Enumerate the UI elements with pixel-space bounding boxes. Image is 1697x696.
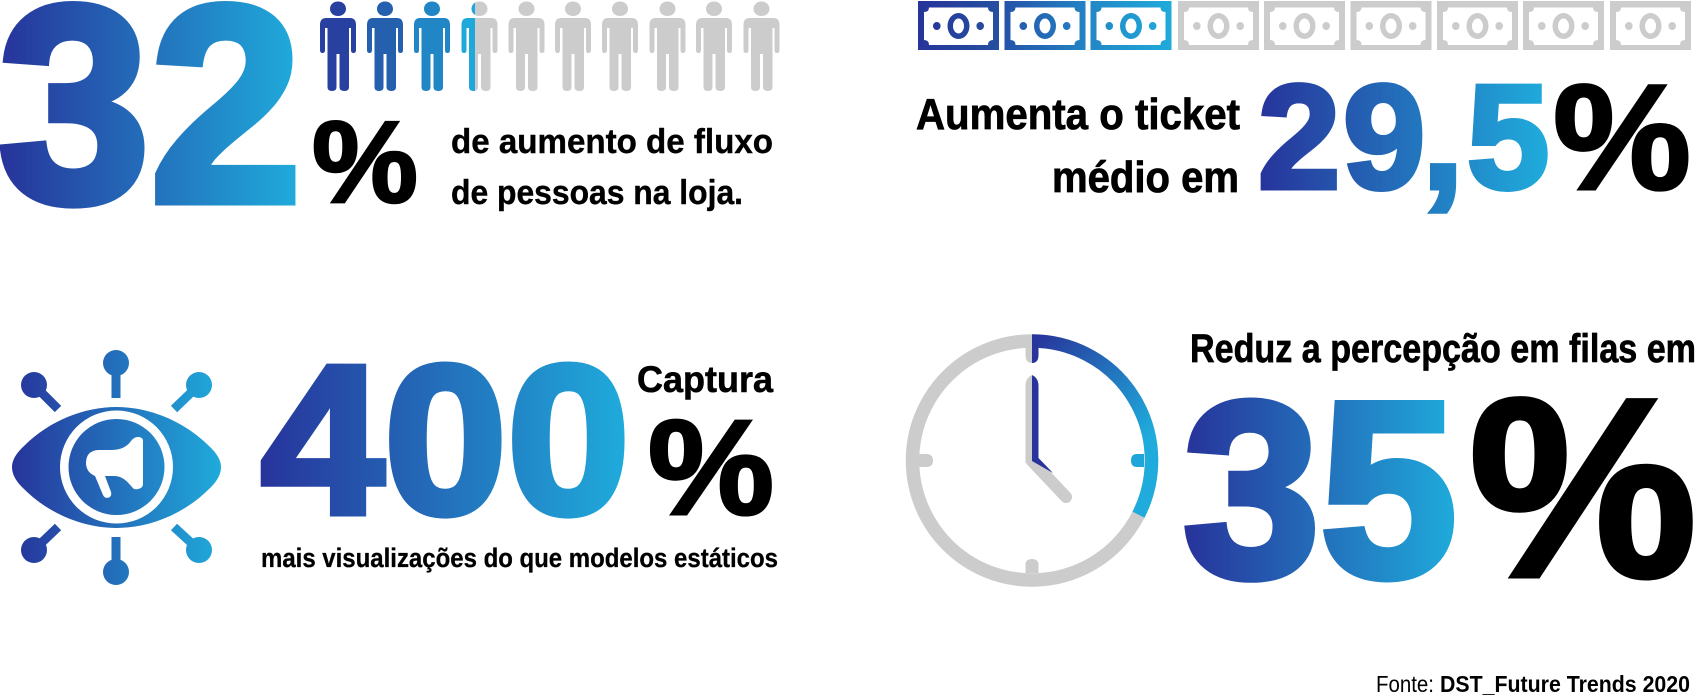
bank note 2 (1004, 1, 1086, 50)
big number 35: 35 (1183, 350, 1457, 629)
eye radiating pins (21, 350, 212, 585)
panel: queue perception 35% (912, 327, 1697, 631)
panel: ticket 29,5% (916, 1, 1691, 221)
bank note 7 (1437, 1, 1518, 50)
icon: eye with megaphone (12, 350, 221, 585)
panel: 400% views (12, 321, 778, 585)
percent sign: % (1553, 53, 1691, 221)
description text: médio em (1052, 153, 1239, 202)
bank note 6 (1350, 1, 1432, 50)
big number 29,5: , (1422, 52, 1464, 220)
bank note 4 (1178, 1, 1259, 50)
description text (451, 123, 773, 212)
eye pupil (68, 419, 164, 515)
icon: clock (912, 341, 1152, 580)
person icon 9 (696, 2, 732, 91)
highlighted arc (1032, 341, 1151, 515)
percent sign: % (1469, 346, 1697, 631)
megaphone (86, 437, 143, 498)
big number 29,5: 2 (1258, 55, 1340, 220)
eye shape (12, 407, 221, 528)
clock ring (912, 341, 1152, 580)
person icon 6 (555, 2, 591, 91)
big number 29,5: 5 (1467, 55, 1549, 220)
description text (916, 90, 1240, 202)
clock hands (1026, 375, 1066, 497)
bank note pictogram row (918, 1, 1691, 50)
big number 29,5: 9 (1343, 55, 1425, 220)
clock ticks (919, 341, 1144, 573)
description text: mais visualizações do que modelos estáticos (261, 543, 778, 573)
percent sign: % (648, 392, 774, 543)
description text: Aumenta o ticket (916, 90, 1240, 139)
person icon 10 (744, 2, 780, 91)
person icon 7 (602, 2, 638, 91)
person icon 8 (650, 2, 686, 91)
person icon 3 (414, 2, 450, 91)
percent sign: % (312, 97, 418, 227)
bank note 9 (1610, 1, 1691, 50)
bank note 3 (1090, 1, 1172, 50)
person icon 2 (367, 2, 403, 91)
bank note 8 (1523, 1, 1604, 50)
label: Captura: Captura (637, 359, 773, 400)
description text: de aumento de fluxo (451, 123, 773, 161)
eye iris ring (60, 410, 173, 524)
people pictogram row (320, 2, 780, 91)
panel: 32% store traffic (0, 1, 780, 212)
big number 400: 400 (261, 321, 630, 558)
description text: de pessoas na loja. (451, 174, 743, 212)
person icon 5 (508, 2, 544, 91)
bank note 1 (918, 1, 999, 50)
person icon 1 (320, 2, 356, 91)
bank note 5 (1264, 1, 1345, 50)
person icon 4 half filled (462, 2, 498, 91)
